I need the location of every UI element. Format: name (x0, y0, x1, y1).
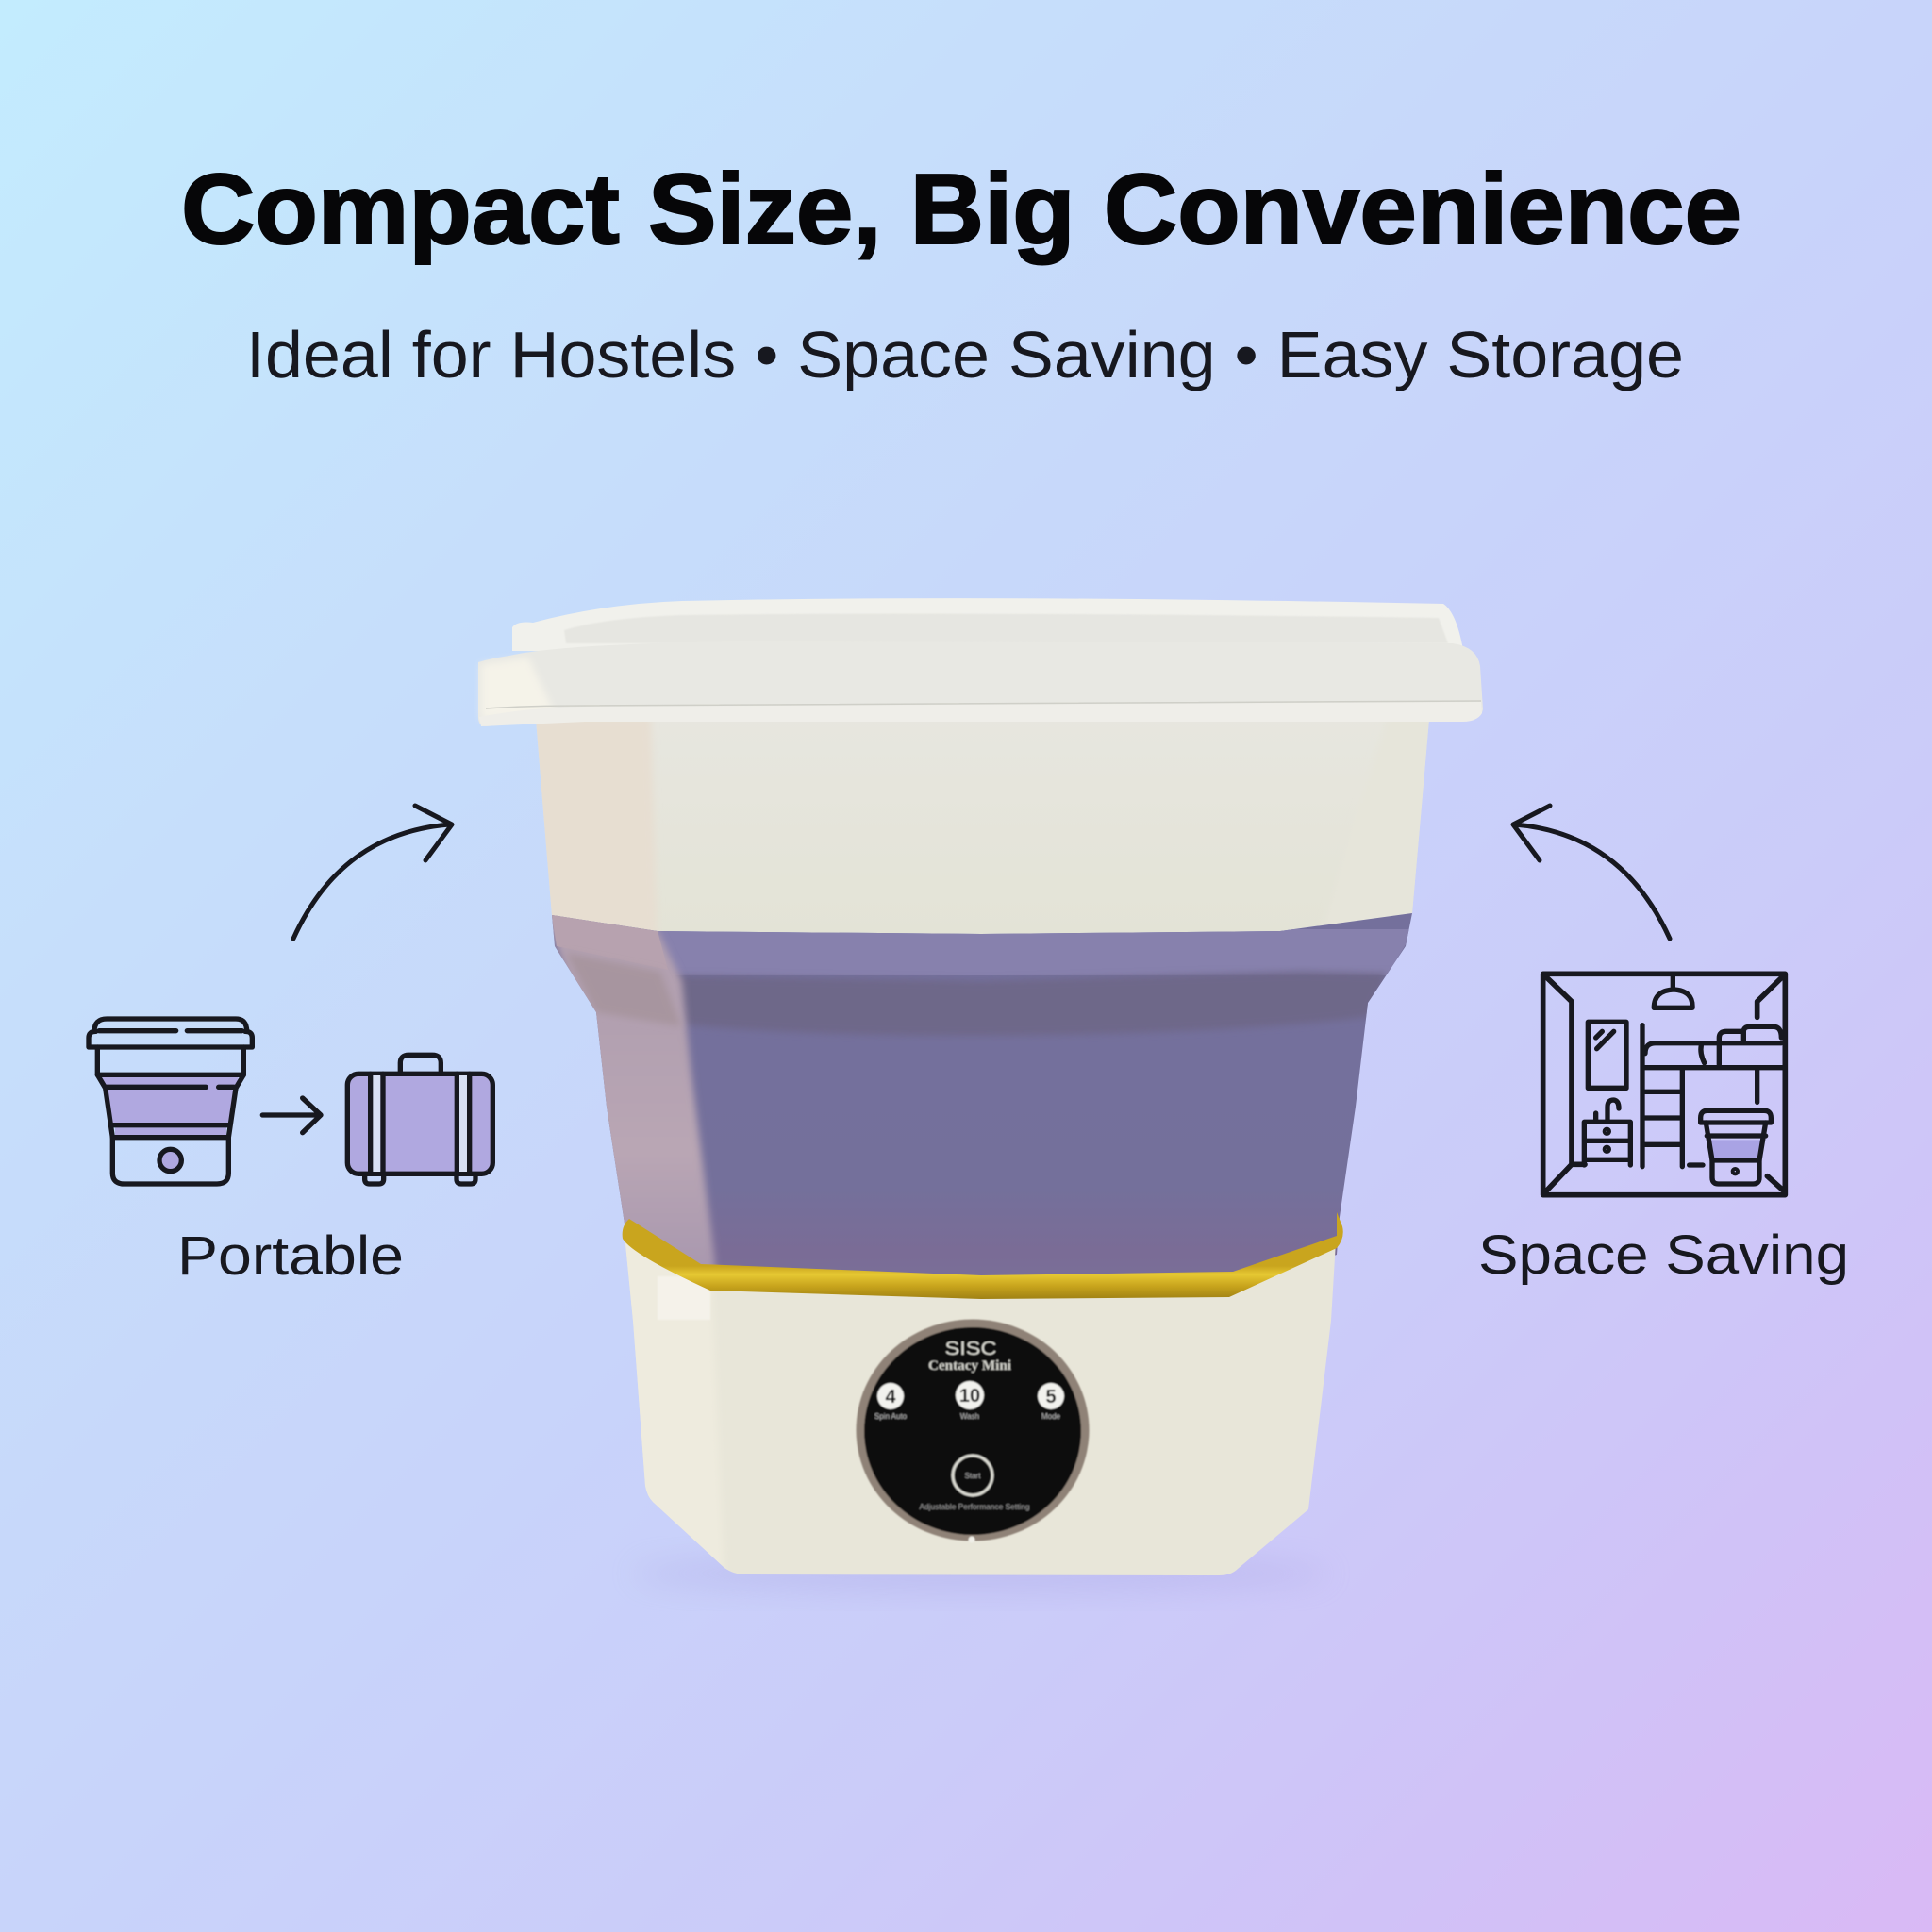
icon: suitcase (347, 1055, 492, 1184)
ceiling lamp (1654, 976, 1692, 1008)
icon: portable washer to suitcase (89, 1019, 492, 1184)
label: portable: Portable (177, 1225, 404, 1287)
dark fold band (660, 972, 1387, 1036)
mirror (1588, 1022, 1626, 1088)
power button (953, 1456, 992, 1495)
sink cabinet (1584, 1100, 1630, 1165)
loft bed and ladder (1642, 1025, 1783, 1167)
button 4: Spin Auto (874, 1412, 908, 1421)
button 10: Wash (960, 1412, 979, 1421)
upper light band (658, 929, 1415, 975)
footer text: Adjustable Performance Setting (919, 1503, 1030, 1511)
gold ring (623, 1212, 1343, 1299)
button 10 (956, 1381, 984, 1421)
icon: small arrow (262, 1098, 321, 1133)
arrow: portable to product (293, 806, 452, 939)
lid lip (479, 702, 1482, 726)
control dial (857, 1319, 1089, 1543)
title: Compact Size, Big Convenience (181, 154, 1741, 265)
icon: mini washer (89, 1019, 252, 1184)
lid rim (478, 641, 1483, 726)
subtitle: Ideal for Hostels • Space Saving • Easy Storage (246, 318, 1684, 391)
button 5: Mode (1041, 1412, 1061, 1421)
lid (478, 598, 1483, 726)
button 5: 5 (1045, 1387, 1057, 1407)
arrow: space saving to product (1513, 806, 1670, 939)
label: space saving: Space Saving (1478, 1224, 1849, 1286)
icon: hostel room with washer (1543, 974, 1785, 1195)
lid top surface (512, 598, 1464, 656)
ground shadow (632, 1555, 1330, 1592)
power button: Start (965, 1472, 981, 1480)
model text: Centacy Mini (928, 1358, 1011, 1374)
brand text: SISC (945, 1339, 996, 1359)
button 4: 4 (885, 1387, 896, 1407)
pink left facet (552, 915, 719, 1264)
mini washer (1701, 1110, 1771, 1184)
button 4 (874, 1383, 908, 1421)
room frame (1543, 974, 1785, 1195)
cream base (625, 1241, 1336, 1575)
upper cream body (528, 717, 1434, 939)
product: folding washing machine (478, 598, 1483, 1592)
button 5 (1038, 1383, 1064, 1421)
dial notch (968, 1536, 975, 1543)
purple collapsible section (552, 913, 1412, 1275)
button 10: 10 (959, 1386, 980, 1407)
